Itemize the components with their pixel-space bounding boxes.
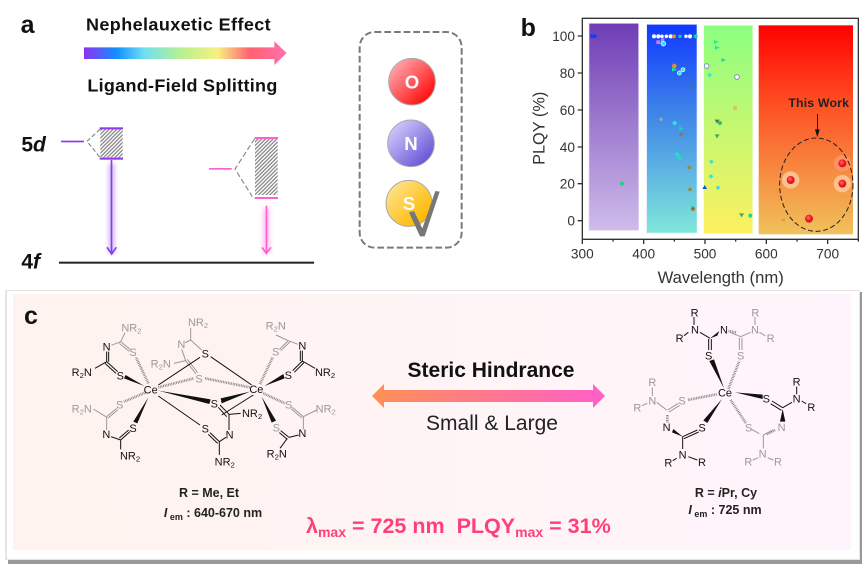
grey atom labels: S — [745, 423, 752, 435]
black atom labels: N — [720, 325, 728, 337]
grey atom labels: N — [278, 321, 286, 333]
grey atom labels: N — [759, 448, 767, 460]
right molecule caption: R = iPr, Cy — [695, 486, 757, 500]
y axis tick labels: 0 — [567, 214, 575, 229]
grey atom labels: S — [678, 396, 686, 408]
grey atom labels: N — [778, 422, 786, 434]
black atom labels: S — [285, 370, 292, 382]
spectral bands — [589, 23, 853, 234]
black atom labels: S — [129, 423, 137, 435]
check mark — [409, 191, 440, 236]
right molecule caption: : 725 nm — [707, 503, 762, 517]
grey atom labels: S — [273, 422, 280, 434]
right molecule caption: I — [688, 503, 692, 517]
x axis tick labels: 500 — [694, 247, 717, 262]
grey bonds — [642, 317, 773, 460]
grey atom labels: NR — [316, 404, 332, 416]
black atom labels: 2 — [80, 371, 84, 380]
grey atom labels: 2 — [80, 408, 84, 417]
y axis tick labels: 60 — [560, 103, 575, 118]
hashed grey bonds — [124, 357, 285, 403]
black atom labels: R — [267, 449, 275, 461]
violet emission arrow — [107, 160, 116, 254]
left molecule caption: : 640-670 nm — [183, 506, 262, 520]
label 4f: 4f — [21, 251, 42, 274]
black atom labels: N — [298, 428, 306, 440]
y axis tick labels: 80 — [560, 66, 575, 81]
black atom labels: N — [84, 367, 92, 379]
black atom labels: Ce — [249, 384, 263, 396]
grey atom labels: S — [129, 347, 137, 359]
grey atom labels: R — [744, 457, 752, 469]
y axis tick labels: 40 — [560, 140, 575, 155]
dashed frame — [360, 32, 462, 248]
pink metrics line: max — [515, 524, 543, 540]
pink metrics line: λ — [306, 514, 318, 538]
this work data points — [782, 155, 851, 223]
black atom labels: N — [298, 341, 306, 353]
black atom labels: 2 — [136, 454, 140, 463]
panel a: energy level diagram — [21, 11, 314, 274]
black atom labels: N — [279, 449, 287, 461]
grey atom labels: 2 — [204, 321, 208, 330]
x axis title: Wavelength (nm) — [658, 268, 784, 287]
black atom labels: N — [103, 341, 111, 353]
black atom labels: R — [691, 307, 699, 319]
violet 5d splitting — [61, 127, 123, 160]
grey atom labels — [72, 317, 336, 434]
grey atom labels: R — [648, 377, 656, 389]
pink 5d splitting — [209, 137, 278, 199]
black atom labels: Ce — [718, 388, 732, 400]
double arrow — [372, 384, 605, 408]
this work arrow — [815, 114, 820, 137]
black atom labels: S — [202, 423, 209, 435]
grey atom labels: NR — [188, 317, 204, 329]
atom O: O — [405, 71, 419, 92]
x axis tick labels: 600 — [755, 247, 778, 262]
x axis tick labels: 400 — [632, 247, 655, 262]
steric hindrance heading: Steric Hindrance — [408, 359, 574, 382]
left molecule caption — [164, 486, 262, 522]
atom N: N — [404, 133, 418, 154]
black atom labels: 2 — [231, 460, 235, 469]
4f baseline — [59, 262, 314, 264]
grey atom labels: R — [774, 457, 782, 469]
outer shadow card — [5, 290, 862, 564]
y axis tick labels — [552, 29, 575, 229]
grey atom labels: 2 — [159, 362, 163, 371]
grey atom labels: N — [177, 339, 185, 351]
atom O — [389, 58, 435, 105]
black atom labels: R — [807, 402, 815, 414]
atom N — [388, 120, 434, 167]
grey atom labels: S — [737, 351, 744, 363]
grey atom labels: S — [116, 400, 123, 412]
black atom labels — [72, 341, 335, 469]
left dimer molecule — [72, 317, 336, 469]
right monomer molecule — [633, 307, 815, 470]
black atom labels: R — [698, 457, 706, 469]
y axis title: PLQY (%) — [531, 92, 549, 165]
heading: nephelauxetic effect: Nephelauxetic Effect — [86, 15, 271, 35]
black atom labels: R — [676, 333, 684, 345]
x axis tick labels — [571, 247, 839, 262]
pink metrics line: = 31% — [543, 514, 611, 538]
grey atom labels: R — [767, 333, 775, 345]
this work label: This Work — [788, 96, 849, 110]
right molecule caption — [688, 486, 762, 519]
black atom labels: S — [705, 351, 712, 363]
pink emission arrow — [262, 206, 271, 253]
black bonds — [673, 317, 806, 461]
y axis tick labels: 20 — [560, 177, 575, 192]
scatter points — [590, 34, 785, 222]
pink metrics line: = 725 nm — [346, 514, 451, 538]
panel b: PLQY vs wavelength chart — [521, 14, 858, 287]
hashed grey bonds — [667, 331, 775, 434]
axes frame — [578, 18, 858, 244]
grey atom labels: R — [751, 307, 759, 319]
label b: b — [521, 14, 536, 42]
y axis tick labels: 100 — [552, 29, 575, 44]
black atom labels: R — [664, 458, 672, 470]
grey atom labels: S — [272, 347, 279, 359]
label 5d: 5d — [21, 133, 47, 156]
label c: c — [24, 302, 38, 330]
black atom labels: S — [202, 348, 209, 360]
grey atom labels: N — [84, 404, 92, 416]
black atom labels: N — [679, 449, 687, 461]
grey atom labels: N — [751, 325, 759, 337]
grey atom labels: R — [633, 403, 641, 415]
rainbow arrow — [84, 41, 287, 65]
solid wedge bonds — [672, 331, 785, 437]
grey atom labels: NR — [121, 322, 137, 334]
black atom labels: NR — [215, 456, 231, 468]
black atom labels: R — [793, 377, 801, 389]
black atom labels: NR — [315, 367, 331, 379]
solid wedge bonds — [124, 374, 285, 423]
left molecule caption: I — [164, 506, 168, 520]
grey atom labels: 2 — [274, 325, 278, 334]
black bonds — [95, 351, 315, 455]
black atom labels: S — [763, 393, 770, 405]
black atom labels: N — [663, 422, 671, 434]
x axis tick labels: 700 — [816, 247, 839, 262]
x axis tick labels: 300 — [571, 247, 594, 262]
black atom labels: N — [793, 394, 801, 406]
black atom labels: R — [72, 367, 80, 379]
grey atom labels: S — [195, 373, 203, 385]
grey atom labels — [633, 307, 786, 469]
grey atom labels: S — [285, 400, 292, 412]
left molecule caption: em — [167, 512, 183, 522]
black atom labels: NR — [120, 450, 136, 462]
atom S — [386, 180, 432, 226]
left molecule caption: R = Me, Et — [179, 486, 240, 500]
grey bonds — [93, 328, 317, 430]
pink metrics line: max — [318, 524, 346, 540]
grey atom labels: 2 — [332, 408, 336, 417]
pink metrics line: PLQY — [457, 514, 515, 538]
black atom labels: Ce — [144, 385, 158, 397]
grey atom labels: N — [648, 396, 656, 408]
black atom labels: N — [102, 429, 110, 441]
grey atom labels: 2 — [137, 326, 141, 335]
dashed ellipse — [780, 138, 853, 231]
black atom labels: S — [211, 398, 218, 410]
black atom labels: NR — [242, 408, 258, 420]
black atom labels: N — [691, 325, 699, 337]
heading: ligand-field splitting: Ligand-Field Splitting — [87, 75, 277, 95]
black atom labels: S — [117, 370, 124, 382]
right molecule caption: em — [692, 509, 707, 519]
tinted background — [13, 294, 851, 550]
panel c: steric hindrance frame — [5, 290, 862, 564]
panel: coordinating atoms O N S — [360, 32, 462, 248]
atom S: S — [403, 193, 415, 214]
black atom labels: 2 — [275, 453, 279, 462]
label a: a — [21, 11, 36, 39]
grey atom labels: R — [151, 358, 159, 370]
grey atom labels: N — [163, 358, 171, 370]
grey atom labels: R — [266, 321, 274, 333]
black atom labels: 2 — [331, 371, 335, 380]
grey atom labels: R — [72, 404, 80, 416]
small and large: Small & Large — [426, 412, 558, 435]
black atom labels: N — [226, 430, 234, 442]
black atom labels — [663, 307, 815, 470]
black atom labels: 2 — [258, 412, 262, 421]
black atom labels: S — [698, 423, 706, 435]
